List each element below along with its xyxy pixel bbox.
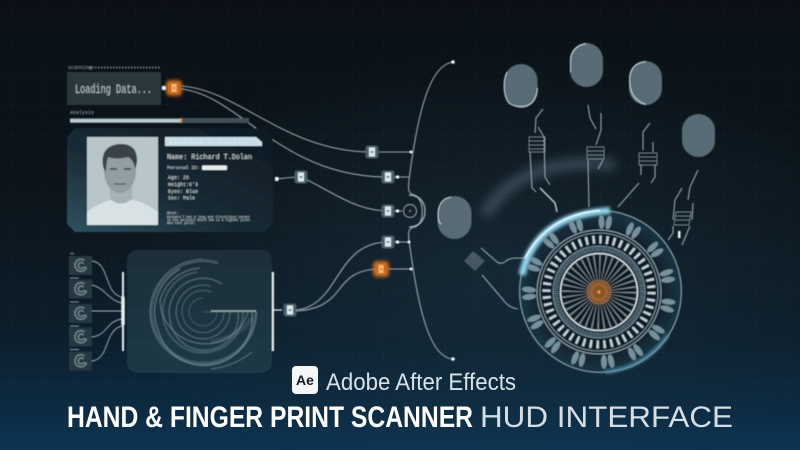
thumb wiring [481,248,525,309]
profile details: in the military where she is a fighter pilot [167,218,250,222]
ring wiring [618,123,657,207]
profile details: Richard T has a long and illustrious career [167,215,250,219]
profile details: About: [167,211,179,215]
panel: fingerprint analysis [127,250,272,373]
profile details: Personal ID: [167,165,199,171]
brackets [123,272,282,351]
highlight arc [522,210,610,275]
badge: After Effects logo: Ae [296,372,314,388]
panel: profile card: Richard T.Dolan [169,140,241,146]
finger wiring [481,105,698,309]
panel: profile card [67,128,273,232]
fingerprint pads [438,43,715,271]
profile details: Sex: Male [168,196,195,202]
little finger wiring [668,170,698,245]
middle wiring [587,105,604,207]
lower glow arc [605,335,668,372]
progress dots [89,66,161,68]
ring finger pad [629,61,662,105]
connector lines [181,62,453,359]
title: HUD INTERFACE [480,401,733,434]
badge: After Effects logo [292,366,318,394]
petal pairs [522,214,676,370]
profile details: Eyes: Blue [168,189,198,195]
little finger pad [682,114,715,157]
profile details: Height:6'3 [168,182,198,188]
glow arc over palm [485,164,615,215]
chart: circular fingerprint scan [150,259,256,369]
profile details [167,154,252,225]
palm patch [464,251,485,271]
profile details: Age: 26 [168,175,189,181]
index finger pad [504,64,538,108]
subtitle: Adobe After Effects [326,369,516,396]
fingerprint scanner dial [520,210,682,372]
nodes on connector lines [275,60,455,361]
thumb pad [438,196,472,239]
name banner [165,137,262,146]
panel: loading status: Loading Data... [75,83,152,97]
profile details: Name: Richard T.Dolan [167,154,252,162]
icon: orange status node [162,80,182,96]
panel: loading status: Analysis [70,110,94,116]
thumbnails: fingerprint samples [69,253,122,370]
panel: loading status: scanning [68,65,92,71]
index wiring [529,109,557,212]
tick rings [537,230,661,354]
portrait photo [87,137,158,225]
profile details: and test pilot. [167,221,196,225]
middle finger pad [570,43,603,87]
title: HAND & FINGER PRINT SCANNER [67,401,473,434]
panel: loading status [67,65,249,123]
